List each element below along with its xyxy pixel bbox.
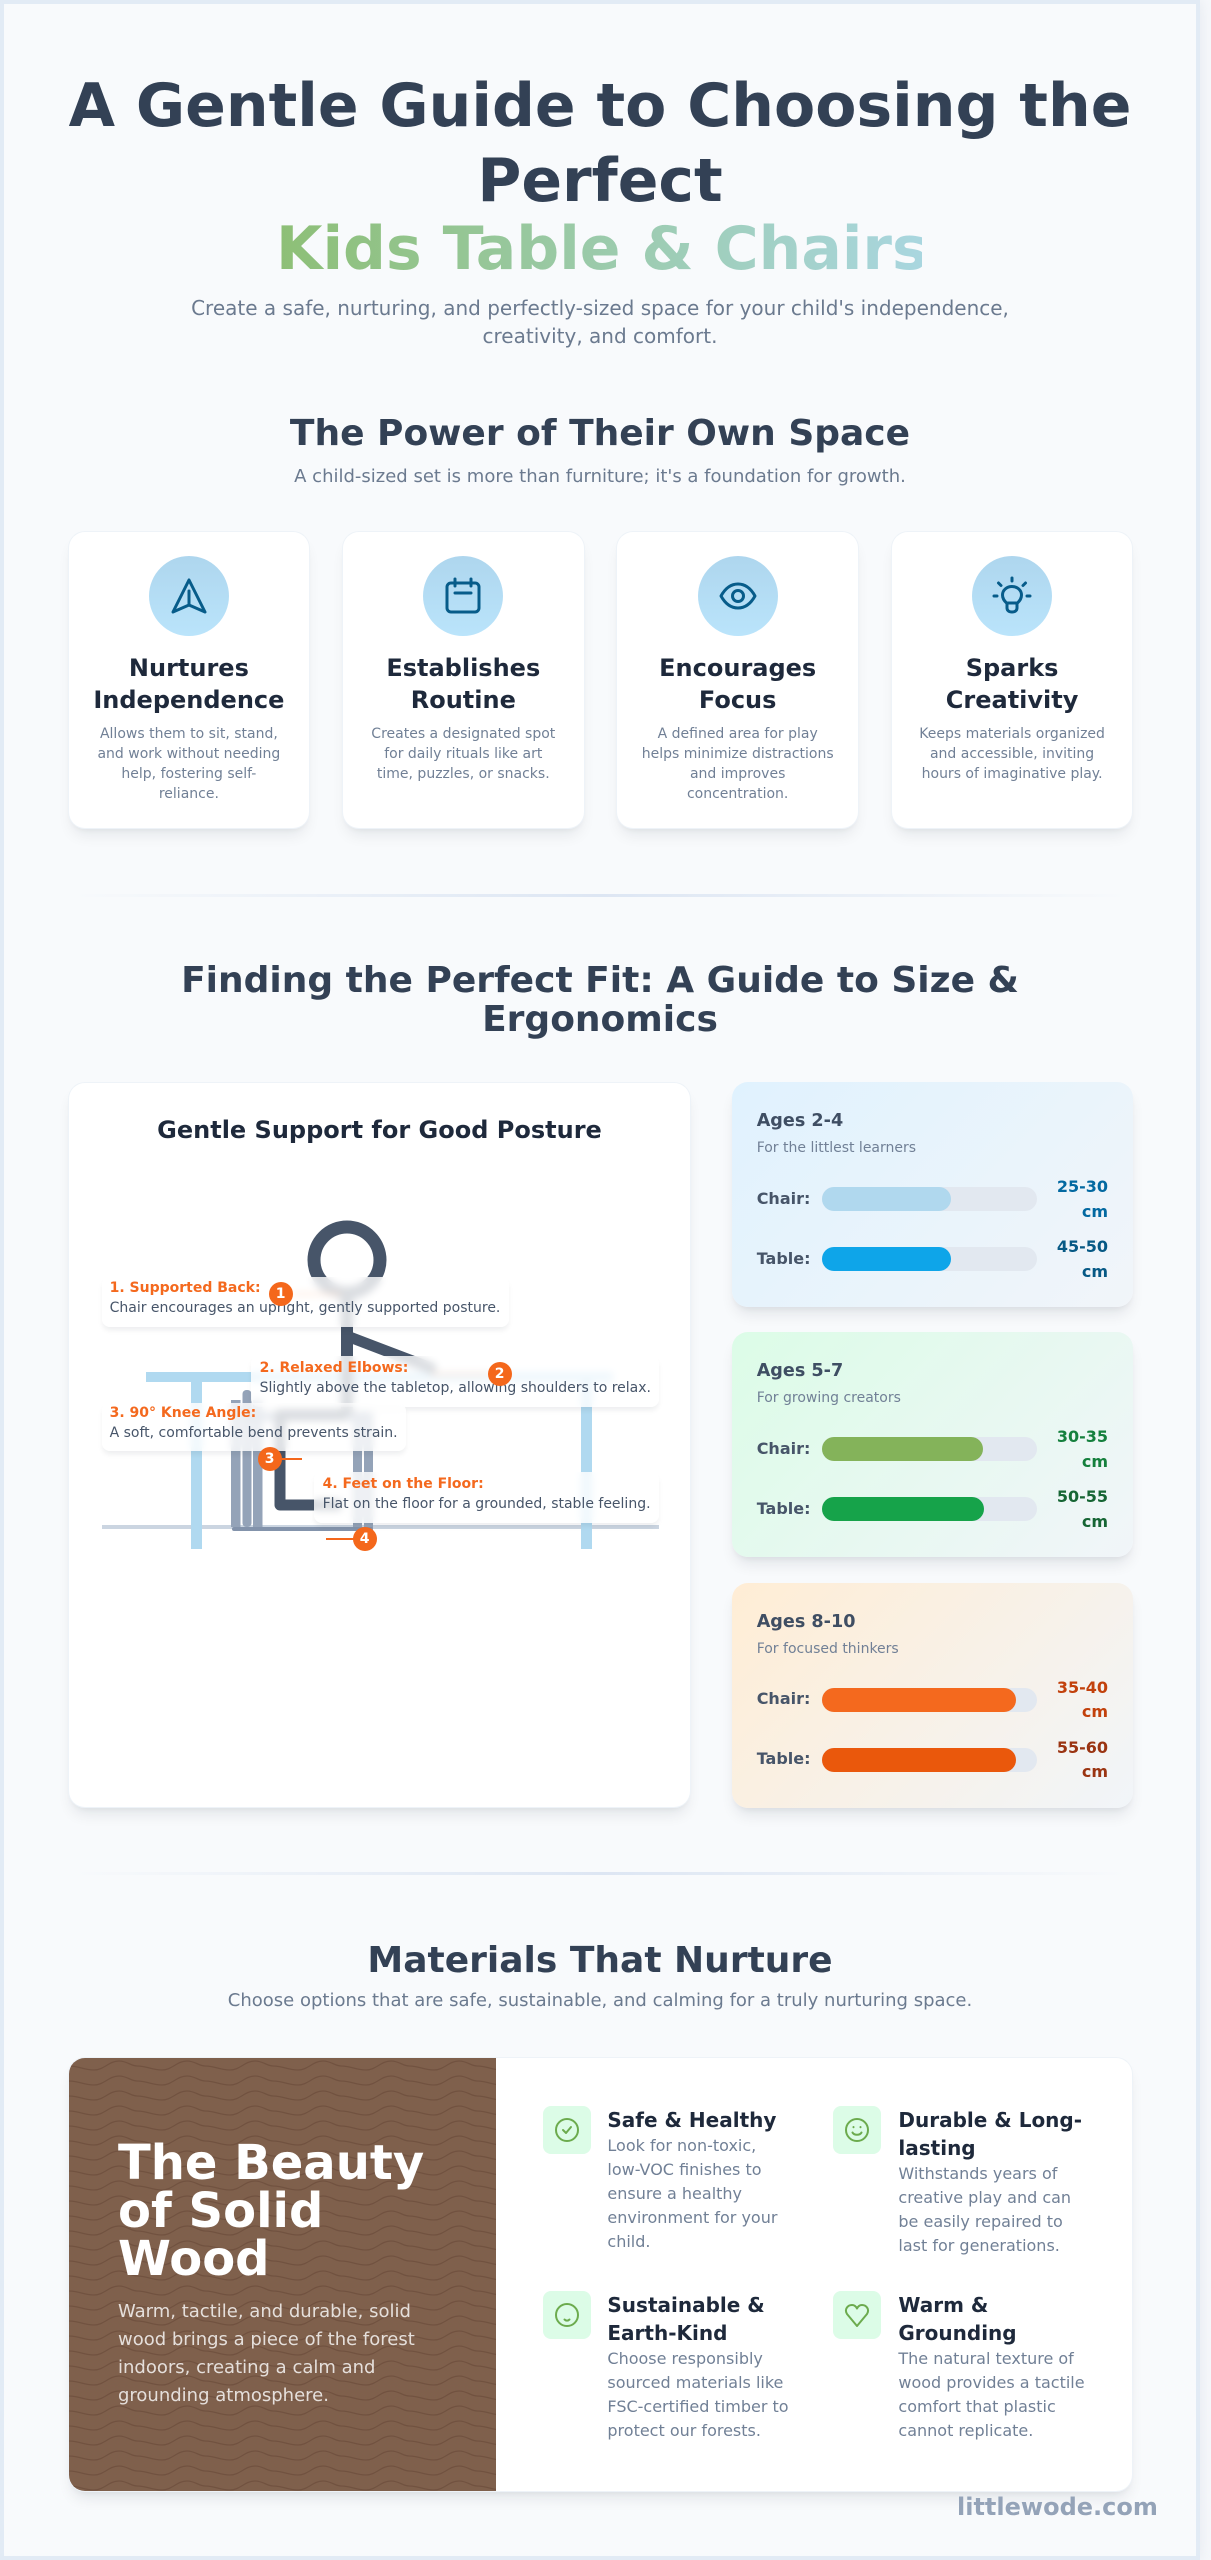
wood heading: The Beauty: [118, 2135, 424, 2191]
size card: Ages 5-7: [732, 1332, 1133, 1557]
table label: Table:: [757, 1749, 811, 1768]
callout 1: supported back: [102, 1277, 509, 1327]
marker 2: [488, 1362, 512, 1386]
chair value: [1057, 1177, 1108, 1221]
table value: 55-60: [1057, 1738, 1108, 1757]
marker 3: [258, 1447, 282, 1471]
callout 4: feet on the floor: Flat on the floor for a grounded, stable feeling.: [323, 1496, 651, 1512]
feature title: Earth-Kind: [607, 2321, 727, 2345]
callout 4: feet on the floor: 4. Feet on the Floor:: [323, 1476, 484, 1492]
table value: [1057, 1487, 1108, 1531]
subtitle: Create a safe, nurturing, and perfectly-sized space for your child's independence,: [191, 296, 1009, 320]
table label: Table:: [757, 1248, 811, 1268]
wood heading: [118, 2135, 424, 2287]
table value: cm: [1082, 1262, 1108, 1281]
section heading: The Power of Their Own Space: The Power of Their Own Space: [290, 413, 910, 454]
watermark: littlewode.com: littlewode.com: [957, 2493, 1158, 2521]
feature: warm and grounding: [833, 2291, 1085, 2440]
wood heading: Wood: [118, 2231, 270, 2287]
table value: cm: [1082, 1512, 1108, 1531]
age subheading: For growing creators: [757, 1390, 901, 1406]
feature text: Withstands years of: [898, 2164, 1057, 2183]
card title: [946, 654, 1078, 714]
card title: Sparks: [966, 654, 1058, 682]
chair label: Chair:: [757, 1689, 810, 1708]
card text: Creates a designated spot: [371, 726, 555, 742]
feature text: FSC-certified timber to: [607, 2397, 789, 2416]
card text: and work without needing: [97, 746, 280, 762]
table value: 50-55: [1057, 1487, 1108, 1506]
chair value: cm: [1082, 1452, 1108, 1471]
size card: Ages 2-4: [732, 1082, 1133, 1307]
callout 3: knee angle: 3. 90° Knee Angle:: [110, 1405, 256, 1421]
card title: Encourages: [659, 654, 816, 682]
icon: light bulb: [972, 556, 1052, 636]
section heading: Finding the Perfect Fit: Finding the Perfect Fit: A Guide to Size &: [181, 960, 1019, 1000]
wood panel: [69, 2058, 496, 2491]
panel: materials: [69, 2058, 1132, 2491]
section heading: Materials That Nurture: Materials That Nurture: [367, 1940, 833, 1981]
feature text: creative play and can: [898, 2188, 1071, 2207]
callout 1: supported back: Chair encourages an upright, gently supported posture.: [110, 1300, 500, 1316]
card text: [919, 726, 1105, 782]
section heading: Finding the Perfect Fit: [181, 960, 1019, 1040]
chair value: cm: [1082, 1702, 1108, 1721]
card text: reliance.: [159, 786, 219, 802]
feature text: The natural texture of: [898, 2349, 1074, 2368]
card text: Keeps materials organized: [919, 726, 1105, 742]
feature text: [607, 2349, 789, 2440]
card text: and accessible, inviting: [930, 746, 1094, 762]
feature text: environment for your: [607, 2208, 777, 2227]
feature text: ensure a healthy: [607, 2184, 742, 2203]
table value: [1057, 1237, 1108, 1281]
table value: [1057, 1738, 1108, 1781]
feature title: lasting: [898, 2136, 976, 2160]
feature text: protect our forests.: [607, 2421, 761, 2440]
age subheading: For the littlest learners: [757, 1140, 916, 1156]
table value: cm: [1082, 1762, 1108, 1781]
card title: [386, 654, 540, 714]
size card: Ages 8-10: [732, 1583, 1133, 1808]
section heading: Finding the Perfect Fit: Ergonomics: [482, 999, 718, 1040]
marker 3: 3: [265, 1451, 274, 1467]
feature text: sourced materials like: [607, 2373, 783, 2392]
marker 1: 1: [276, 1286, 285, 1302]
card title: Nurtures: [129, 654, 249, 682]
feature text: Look for non-toxic,: [607, 2136, 756, 2155]
subtitle: creativity, and comfort.: [483, 324, 717, 348]
card text: help, fostering self-: [121, 766, 256, 782]
card title: Focus: [699, 686, 776, 714]
feature title: [898, 2293, 1017, 2345]
table bar: [822, 1247, 1037, 1271]
feature: durable: [833, 2106, 1082, 2255]
wood text: [118, 2301, 415, 2406]
icon: navigation arrow: [149, 556, 229, 636]
card text: A defined area for play: [658, 726, 818, 742]
chair label: Chair:: [757, 1188, 810, 1208]
chair value: 35-40: [1057, 1678, 1108, 1697]
chair label: Chair:: [757, 1439, 810, 1458]
chair value: 25-30: [1057, 1177, 1108, 1196]
feature title: Sustainable &: [607, 2293, 765, 2317]
card text: for daily rituals like art: [384, 746, 542, 762]
card text: [97, 726, 280, 802]
feature title: Durable & Long-: [898, 2108, 1082, 2132]
wood text: wood brings a piece of the forest: [118, 2329, 415, 2350]
icon: leaf face: [543, 2291, 591, 2339]
card title: [93, 654, 284, 714]
card: Nurtures Independence: [69, 532, 309, 828]
feature text: comfort that plastic: [898, 2397, 1056, 2416]
feature title: [898, 2108, 1082, 2160]
section subheading: Choose options that are safe, sustainable, and calming for a truly nurturing space.: [228, 1990, 972, 2011]
card text: [642, 726, 834, 802]
title highlight: Kids Table & Chairs: Kids Table & Chairs: [276, 214, 928, 284]
wood text: indoors, creating a calm and: [118, 2357, 376, 2378]
callout 1: supported back: 1. Supported Back:: [110, 1280, 261, 1296]
callout 2: relaxed elbows: 2. Relaxed Elbows:: [260, 1360, 408, 1376]
card: Establishes Routine: [343, 532, 584, 828]
table bar: [822, 1748, 1037, 1772]
table bar: [822, 1497, 1037, 1521]
subtitle: [191, 296, 1009, 348]
table value: 45-50: [1057, 1237, 1108, 1256]
feature title: [607, 2293, 765, 2345]
marker 1: [269, 1282, 293, 1306]
card text: and improves: [690, 766, 785, 782]
feature text: Choose responsibly: [607, 2349, 763, 2368]
wood heading: of Solid: [118, 2183, 323, 2239]
card text: Allows them to sit, stand,: [100, 726, 278, 742]
callout 4: feet on the floor: [314, 1472, 659, 1523]
age subheading: For focused thinkers: [757, 1641, 899, 1657]
chair value: cm: [1082, 1202, 1108, 1221]
feature title: Safe & Healthy: [607, 2108, 776, 2132]
feature text: [607, 2136, 778, 2251]
card: Encourages Focus: [617, 532, 858, 828]
title: Perfect: [477, 146, 723, 216]
feature text: last for generations.: [898, 2236, 1060, 2255]
card title: Independence: [93, 686, 284, 714]
chair value: 30-35: [1057, 1427, 1108, 1446]
feature: safe and healthy: [543, 2106, 778, 2251]
feature text: [898, 2349, 1085, 2440]
feature: sustainable: [543, 2291, 789, 2440]
panel title: Gentle Support for Good Posture: [157, 1116, 602, 1144]
feature text: cannot replicate.: [898, 2421, 1033, 2440]
card: Sparks Creativity: [892, 532, 1132, 828]
card text: hours of imaginative play.: [922, 766, 1103, 782]
feature title: Warm &: [898, 2293, 988, 2317]
chair bar: [822, 1437, 1037, 1461]
callout 2: relaxed elbows: Slightly above the tabletop, allowing shoulders to relax.: [260, 1380, 651, 1396]
diagram: child seated at table: [102, 1220, 659, 1549]
card title: Routine: [411, 686, 516, 714]
wood text: grounding atmosphere.: [118, 2385, 329, 2406]
icon: calendar: [423, 556, 503, 636]
table label: Table:: [757, 1499, 811, 1518]
chair bar: [822, 1688, 1037, 1712]
card text: helps minimize distractions: [642, 746, 834, 762]
icon: smile: [833, 2106, 881, 2154]
wood text: Warm, tactile, and durable, solid: [118, 2301, 411, 2322]
marker 2: 2: [495, 1366, 504, 1382]
title: [69, 71, 1131, 216]
callout 3: knee angle: A soft, comfortable bend prevents strain.: [110, 1425, 398, 1441]
card text: [371, 726, 555, 782]
card text: concentration.: [687, 786, 788, 802]
callout 3: knee angle: [102, 1403, 406, 1451]
icon: eye: [698, 556, 778, 636]
age heading: Ages 8-10: [757, 1612, 855, 1632]
age heading: Ages 2-4: [757, 1111, 843, 1131]
card text: time, puzzles, or snacks.: [377, 766, 550, 782]
card title: [659, 654, 816, 714]
feature title: Grounding: [898, 2321, 1017, 2345]
callout 2: relaxed elbows: [251, 1356, 659, 1407]
icon: heart: [833, 2291, 881, 2339]
chair value: [1057, 1427, 1108, 1471]
card title: Establishes: [386, 654, 540, 682]
feature text: be easily repaired to: [898, 2212, 1063, 2231]
feature text: child.: [607, 2232, 650, 2251]
marker 4: 4: [360, 1531, 369, 1547]
title: A Gentle Guide to Choosing the: [69, 71, 1131, 141]
card title: Creativity: [946, 686, 1078, 714]
feature text: low-VOC finishes to: [607, 2160, 762, 2179]
chair bar: [822, 1187, 1037, 1211]
feature text: wood provides a tactile: [898, 2373, 1085, 2392]
section subheading: A child-sized set is more than furniture; it's a foundation for growth.: [294, 466, 906, 486]
age heading: Ages 5-7: [757, 1361, 843, 1381]
icon: check circle: [543, 2106, 591, 2154]
marker 4: [353, 1527, 377, 1551]
feature text: [898, 2164, 1071, 2255]
chair value: [1057, 1678, 1108, 1721]
panel: posture diagram: [69, 1083, 690, 1807]
